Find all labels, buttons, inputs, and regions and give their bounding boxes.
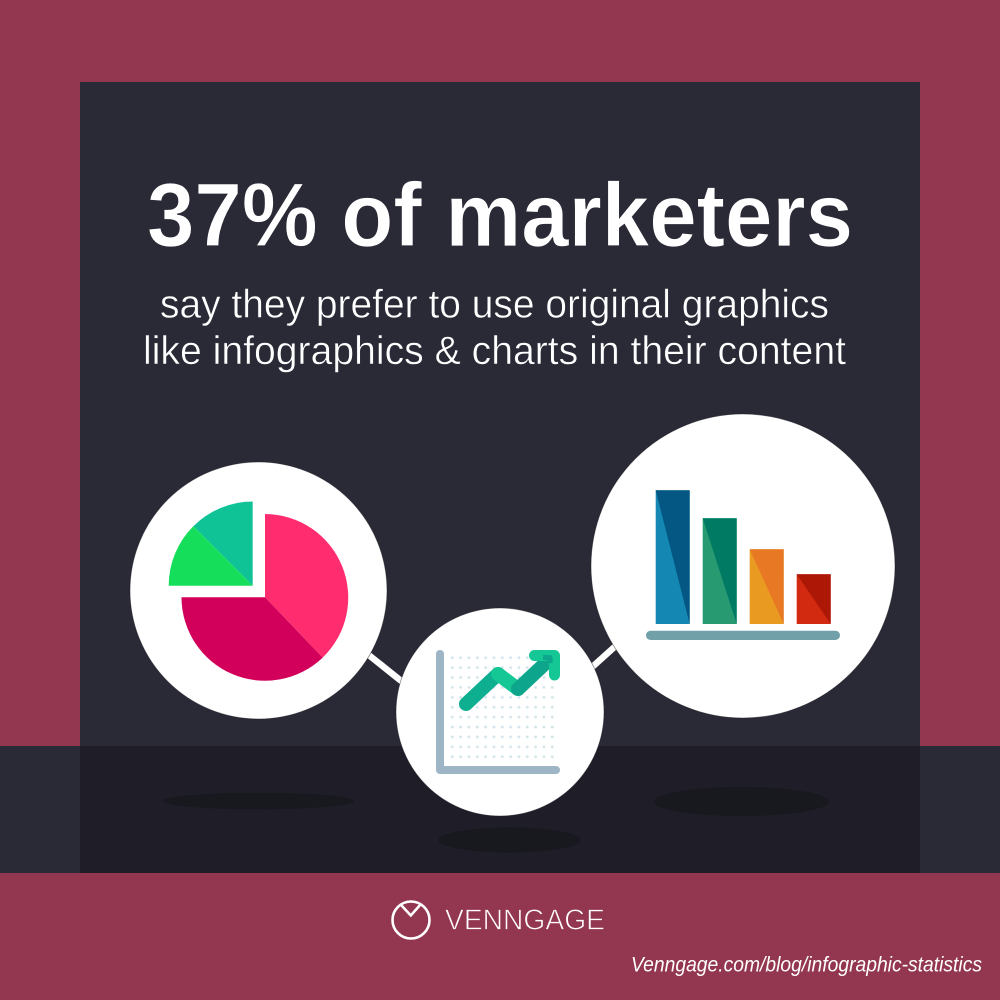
title: 37% of marketers <box>147 166 853 266</box>
baseline <box>646 631 840 640</box>
circle: line chart icon <box>396 608 604 816</box>
shadows under circles <box>163 787 829 852</box>
logo mark <box>392 902 430 938</box>
axes <box>440 654 556 770</box>
floor band <box>0 746 1000 873</box>
subtitle: like infographics & charts in their content <box>143 329 846 373</box>
bar 2 <box>703 518 737 624</box>
panel: dark backdrop <box>80 82 920 873</box>
bar 3 <box>750 549 784 624</box>
subtitle <box>143 282 846 373</box>
circle: pie chart icon <box>130 462 387 719</box>
connector lines <box>365 642 620 684</box>
brand name: VENNGAGE <box>445 904 605 936</box>
bar 1 <box>656 490 690 624</box>
dot grid <box>450 655 555 759</box>
bar 4 <box>797 574 831 624</box>
circle: bar chart icon <box>591 414 895 718</box>
trend arrow <box>466 656 554 704</box>
subtitle: say they prefer to use original graphics <box>160 282 829 326</box>
panel floor <box>80 746 920 873</box>
